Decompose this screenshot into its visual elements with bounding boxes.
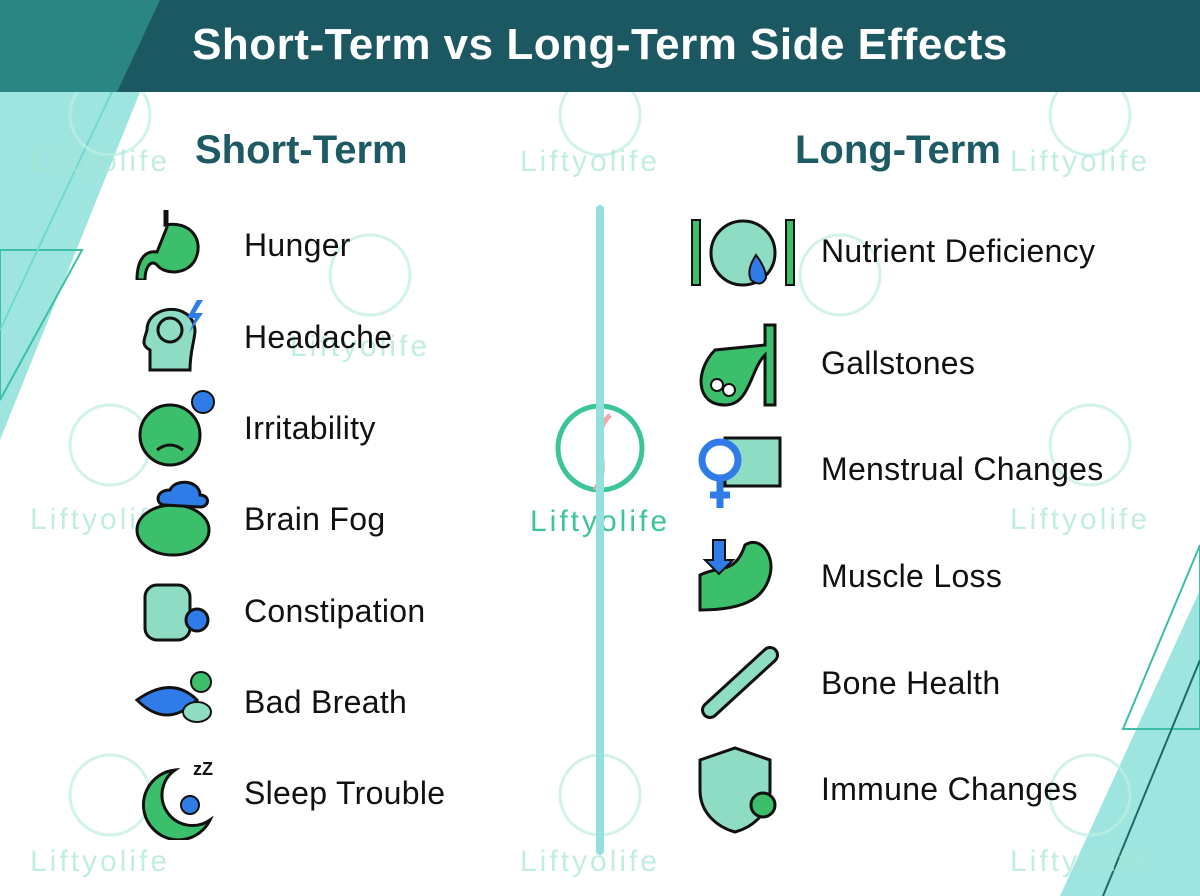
icon: brain — [136, 480, 210, 556]
text: Liftyolife — [1010, 503, 1150, 536]
text: Liftyolife — [1010, 145, 1150, 178]
heading: long-term: Long-Term — [795, 128, 1001, 172]
text: Liftyolife — [30, 503, 170, 536]
panel: short-term: Brain Fog — [244, 501, 385, 537]
heading: short-term: Short-Term — [195, 128, 408, 172]
icon: stomach — [136, 210, 200, 280]
header band — [0, 0, 1200, 92]
panel: short-term: Hunger — [244, 227, 351, 263]
panel: long-term: Menstrual Changes — [821, 451, 1104, 487]
panel: long-term: Bone Health — [821, 665, 1000, 701]
panel: long-term: Muscle Loss — [821, 558, 1002, 594]
icon: shield — [698, 746, 776, 834]
icon: angry face — [138, 390, 215, 466]
panel: short-term: Headache — [244, 319, 392, 355]
icon: bone — [701, 646, 779, 719]
divider — [596, 205, 604, 855]
title: Short-Term vs Long-Term Side Effects — [192, 20, 1008, 69]
panel: long-term — [691, 128, 1104, 834]
panel: short-term: Bad Breath — [244, 684, 407, 720]
text: Liftyolife — [520, 145, 660, 178]
icon: plate — [691, 219, 795, 286]
icon: gallbladder — [700, 324, 776, 406]
panel: short-term: Constipation — [244, 593, 426, 629]
icon: muscle — [698, 539, 772, 612]
watermarks: Liftyolife — [30, 145, 170, 178]
center logo — [530, 404, 670, 538]
panel: short-term — [135, 128, 445, 840]
icon: intestine — [144, 584, 210, 642]
text: Liftyolife — [30, 845, 170, 878]
text: Liftyolife — [520, 845, 660, 878]
icon: lips — [135, 671, 212, 723]
text: Liftyolife — [290, 330, 430, 363]
icon: moon eye: zZ — [193, 759, 213, 779]
panel: short-term: Irritability — [244, 410, 376, 446]
panel: long-term: Immune Changes — [821, 771, 1078, 807]
panel: long-term: Nutrient Deficiency — [821, 233, 1095, 269]
icon: moon eye — [142, 759, 214, 840]
text: Liftyolife — [1010, 845, 1150, 878]
icon: female calendar — [698, 436, 782, 508]
center logo: Liftyolife — [530, 505, 670, 538]
icon: head — [142, 300, 203, 372]
panel: short-term: Sleep Trouble — [244, 775, 445, 811]
panel: long-term: Gallstones — [821, 345, 975, 381]
